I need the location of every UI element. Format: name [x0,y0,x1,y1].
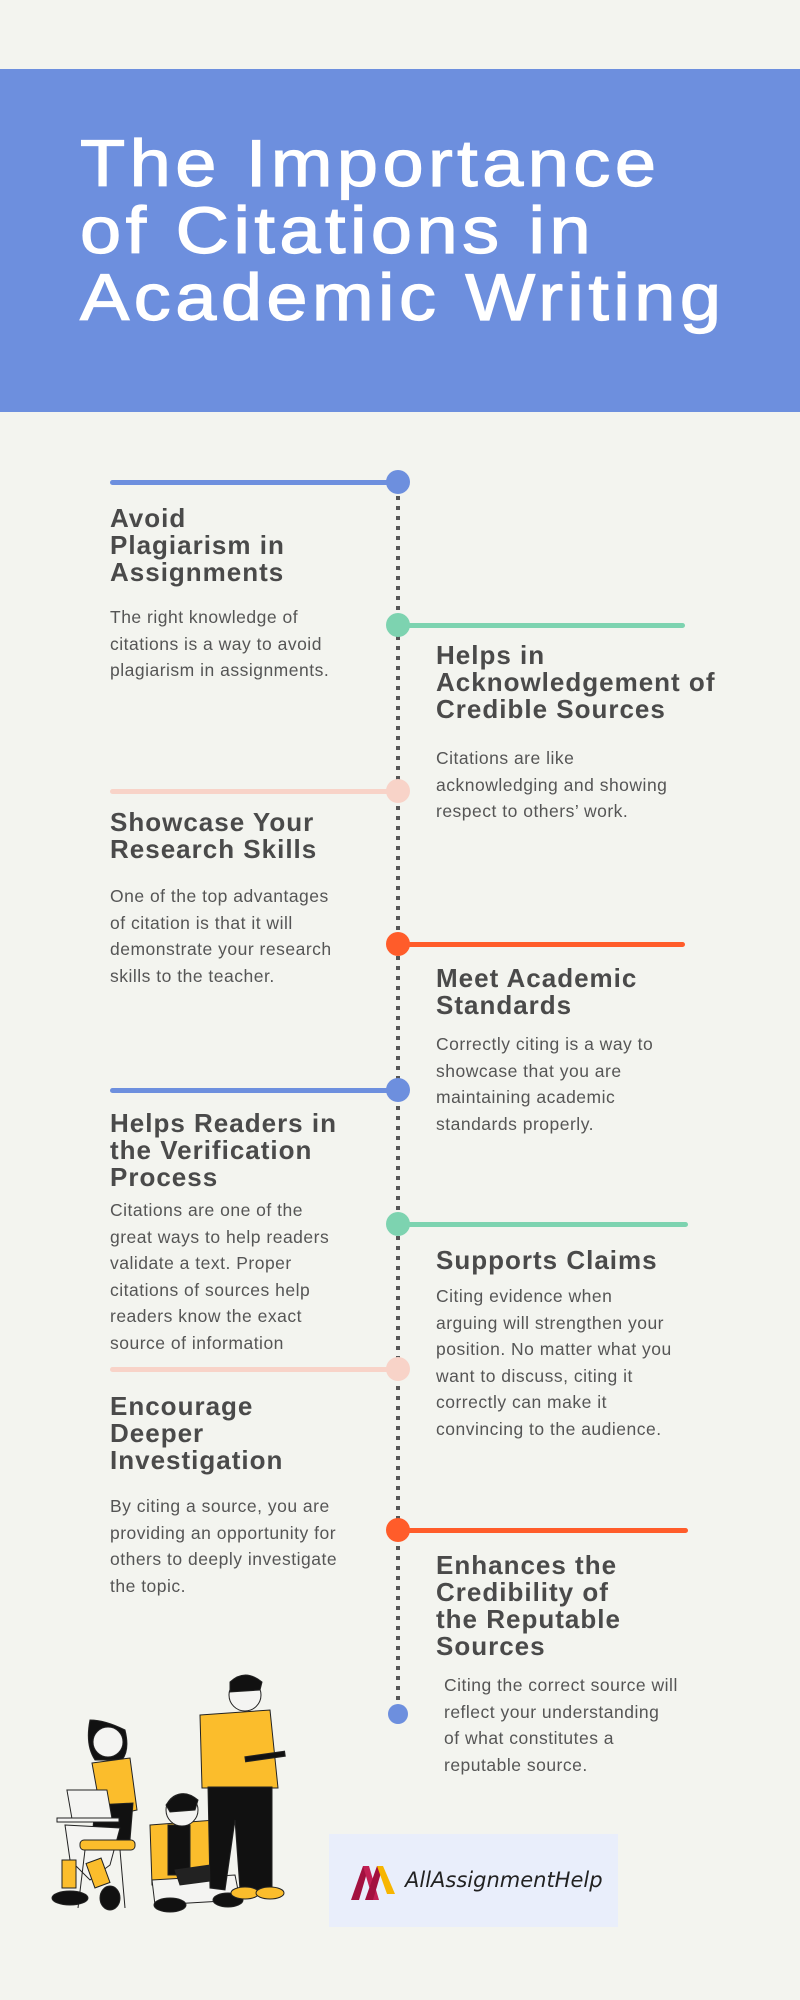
item 3 text: of citation is that it will [110,912,293,932]
end dot [388,1704,408,1724]
item 2 heading: Helps in [436,640,545,670]
item 2 heading [436,640,715,724]
item 6 connector [398,1222,688,1227]
item 8 text: of what constitutes a [444,1728,614,1748]
item 6 text: correctly can make it [436,1392,607,1412]
item 8 connector [398,1528,688,1533]
item 2 connector [398,623,685,628]
item 8 heading [436,1550,621,1661]
item 8 text: Citing the correct source will [444,1675,678,1695]
item 4 text: showcase that you are [436,1060,622,1080]
item 8 heading: the Reputable [436,1604,621,1634]
item 1 heading: Assignments [110,557,284,587]
item 4 text: standards properly. [436,1114,594,1134]
logo mark [351,1866,395,1900]
title: Academic Writing [80,260,725,334]
item 1 text: citations is a way to avoid [110,634,322,654]
item 4 dot [386,932,410,956]
item 7 text: By citing a source, you are [110,1496,330,1516]
item 7 text: the topic. [110,1576,186,1596]
item 2 heading: Credible Sources [436,694,666,724]
item 4 connector [398,942,685,947]
title: The Importance [80,126,660,200]
item 5 heading: the Verification [110,1135,312,1165]
item 5 heading: Process [110,1162,218,1192]
item 2 text [436,748,667,821]
item 5 text: source of information [110,1332,284,1352]
item 6 heading: Supports Claims [436,1245,658,1275]
item 8 text: reputable source. [444,1754,588,1774]
item 2 dot [386,613,410,637]
item 8 heading: Enhances the [436,1550,617,1580]
item 6 text: arguing will strengthen your [436,1312,664,1332]
item 8 text: reflect your understanding [444,1702,659,1722]
logo text: AllAssignmentHelp [405,1868,603,1892]
illustration: students [52,1674,286,1912]
item 7 heading [110,1391,283,1475]
item 1 heading: Avoid [110,503,186,533]
item 1 text [110,607,329,680]
item 5 heading [110,1108,337,1192]
item 6 text: want to discuss, citing it [436,1366,633,1386]
timeline dotted line [396,486,400,1712]
item 6 text [436,1286,672,1438]
item 5 dot [386,1078,410,1102]
item 1 dot [386,470,410,494]
item 5 connector [110,1088,398,1093]
item 4 text [436,1034,653,1134]
item 4 heading: Standards [436,990,572,1020]
item 5 heading: Helps Readers in [110,1108,337,1138]
item 2 text: acknowledging and showing [436,774,667,794]
item 1 text: The right knowledge of [110,607,298,627]
item 7 text: others to deeply investigate [110,1549,337,1569]
item 4 text: Correctly citing is a way to [436,1034,653,1054]
item 8 dot [386,1518,410,1542]
item 4 heading [436,963,637,1020]
item 7 text: providing an opportunity for [110,1522,336,1542]
item 7 connector [110,1367,398,1372]
item 5 text: great ways to help readers [110,1226,329,1246]
item 3 text: One of the top advantages [110,886,329,906]
item 7 heading: Encourage [110,1391,253,1421]
item 7 text [110,1496,337,1596]
item 5 text: readers know the exact [110,1306,302,1326]
item 5 text: validate a text. Proper [110,1253,292,1273]
item 8 heading: Credibility of [436,1577,609,1607]
item 1 connector [110,480,398,485]
item 7 heading: Investigation [110,1445,283,1475]
item 6 text: convincing to the audience. [436,1418,662,1438]
item 3 text: demonstrate your research [110,939,332,959]
item 2 text: respect to others’ work. [436,801,628,821]
item 7 heading: Deeper [110,1418,204,1448]
item 8 heading: Sources [436,1631,546,1661]
item 3 text [110,886,332,986]
item 8 text [444,1675,678,1774]
item 5 text: Citations are one of the [110,1200,303,1220]
header banner [0,69,800,412]
item 2 heading: Acknowledgement of [436,667,715,697]
item 3 heading [110,807,317,864]
title: of Citations in [80,193,595,267]
item 3 dot [386,779,410,803]
item 2 text: Citations are like [436,748,574,768]
item 1 heading [110,503,285,587]
item 6 text: position. No matter what you [436,1339,672,1359]
item 4 text: maintaining academic [436,1087,615,1107]
item 5 text [110,1200,329,1352]
item 3 heading: Research Skills [110,834,317,864]
item 7 dot [386,1357,410,1381]
item 3 connector [110,789,398,794]
item 6 dot [386,1212,410,1236]
item 5 text: citations of sources help [110,1280,310,1300]
item 3 text: skills to the teacher. [110,966,275,986]
item 3 heading: Showcase Your [110,807,314,837]
item 6 text: Citing evidence when [436,1286,612,1306]
title [79,126,725,334]
item 4 heading: Meet Academic [436,963,637,993]
logo box [329,1834,618,1927]
item 1 text: plagiarism in assignments. [110,660,329,680]
item 1 heading: Plagiarism in [110,530,285,560]
